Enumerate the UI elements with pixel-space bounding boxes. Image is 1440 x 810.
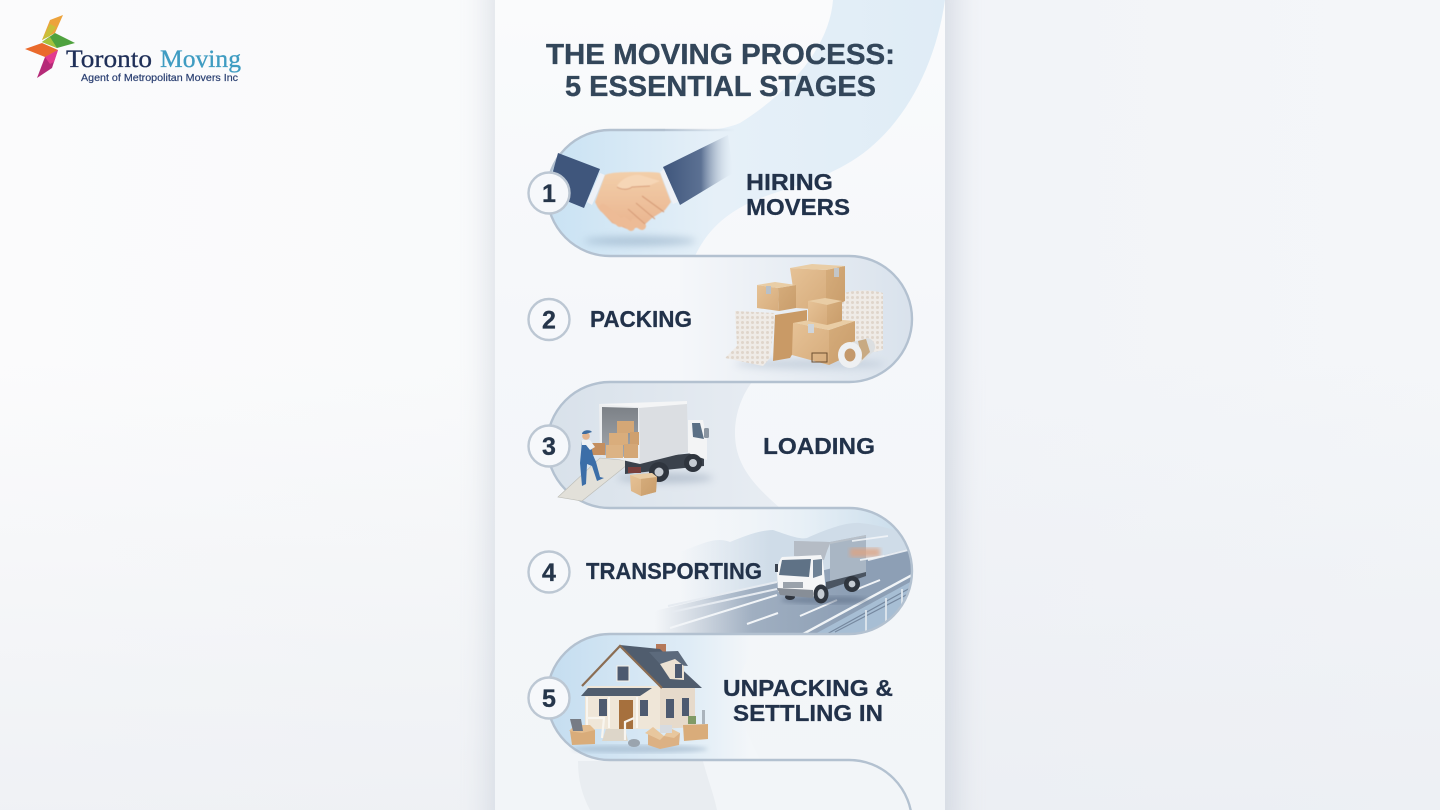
label: hiring movers: MOVERS	[746, 194, 850, 220]
number badge 5	[528, 678, 570, 718]
boxes in truck	[617, 421, 634, 433]
number badge 1: 1	[542, 180, 556, 208]
icon: moving truck	[775, 535, 888, 604]
number badge 2: 2	[542, 306, 556, 334]
right main roof	[620, 645, 702, 688]
tile 1 top edge fade	[665, 129, 735, 131]
panel: stage 4 tile with highway	[666, 509, 911, 633]
porch columns	[587, 697, 637, 728]
logo wordmark: Toronto	[66, 46, 152, 73]
icon: cardboard boxes and bubble wrap	[725, 264, 885, 369]
title: THE MOVING PROCESS:	[546, 39, 895, 71]
lane markings	[670, 580, 880, 628]
number badge 2	[528, 299, 570, 340]
stage labels	[586, 169, 893, 726]
wheels	[649, 462, 669, 482]
panel: lower grey swoosh	[578, 761, 717, 810]
front box	[792, 323, 829, 365]
porch roof	[581, 688, 652, 696]
left large box	[773, 310, 807, 361]
mountains	[702, 523, 864, 597]
tape roll	[852, 338, 875, 367]
logo tagline: Agent of Metropolitan Movers Inc	[81, 72, 238, 84]
icon: worker loading truck	[558, 401, 713, 501]
gable trim	[582, 646, 662, 688]
carton on ground	[630, 473, 657, 496]
bubble wrap left	[725, 311, 775, 366]
right wall	[660, 688, 695, 729]
label: hiring movers	[746, 169, 850, 220]
logo: Toronto Moving	[25, 15, 241, 84]
title: 5 ESSENTIAL STAGES	[565, 71, 876, 103]
door	[619, 700, 633, 729]
panel: stage 5 tile	[547, 634, 767, 760]
worker	[592, 443, 605, 455]
panel: infographic card	[495, 0, 945, 810]
number badge 1	[528, 172, 570, 214]
highway road	[650, 548, 912, 634]
serpentine outline	[547, 130, 912, 810]
chassis	[625, 452, 704, 474]
logo wordmark accent: Moving	[160, 46, 241, 73]
chimney	[656, 644, 666, 653]
number badge 3	[528, 426, 570, 466]
icon: handshake	[547, 135, 733, 246]
panel: stage 3 tile	[547, 382, 780, 508]
gable window	[617, 666, 629, 681]
label: hiring movers: HIRING	[746, 169, 833, 195]
label: packing: PACKING	[590, 306, 692, 332]
back box	[790, 268, 826, 310]
number badge 3: 3	[542, 433, 556, 461]
guard rail far	[668, 549, 912, 612]
steps	[602, 729, 628, 741]
number badge 4	[528, 552, 570, 592]
label: transporting: TRANSPORTING	[586, 558, 762, 584]
mid small box	[808, 301, 827, 325]
number badge 5: 5	[542, 685, 556, 713]
title	[546, 39, 895, 103]
dormer roof	[649, 651, 688, 666]
label: unpacking and settling in	[723, 675, 893, 726]
ramp	[558, 458, 632, 501]
icon: house with moving boxes	[569, 644, 708, 753]
cargo box side	[639, 403, 688, 464]
label: unpacking and settling in: UNPACKING &	[723, 675, 893, 701]
icon: logo star	[25, 15, 75, 78]
cargo interior	[599, 404, 640, 464]
label: loading: LOADING	[763, 433, 875, 459]
label: unpacking and settling in: SETTLING IN	[733, 700, 883, 726]
dormer wall	[660, 659, 684, 680]
gable wall	[585, 651, 660, 696]
number badge 4: 4	[542, 559, 556, 587]
windows	[599, 699, 607, 716]
panel: stage 2 tile	[680, 256, 912, 382]
small left box	[757, 285, 779, 311]
card shadow	[490, 0, 956, 810]
cab	[688, 420, 707, 460]
lower wall	[585, 696, 660, 729]
background swoosh and stage 1 tile	[547, 0, 945, 256]
bridge fence	[818, 582, 910, 633]
moving boxes	[570, 730, 595, 745]
bubble roll	[840, 291, 883, 352]
